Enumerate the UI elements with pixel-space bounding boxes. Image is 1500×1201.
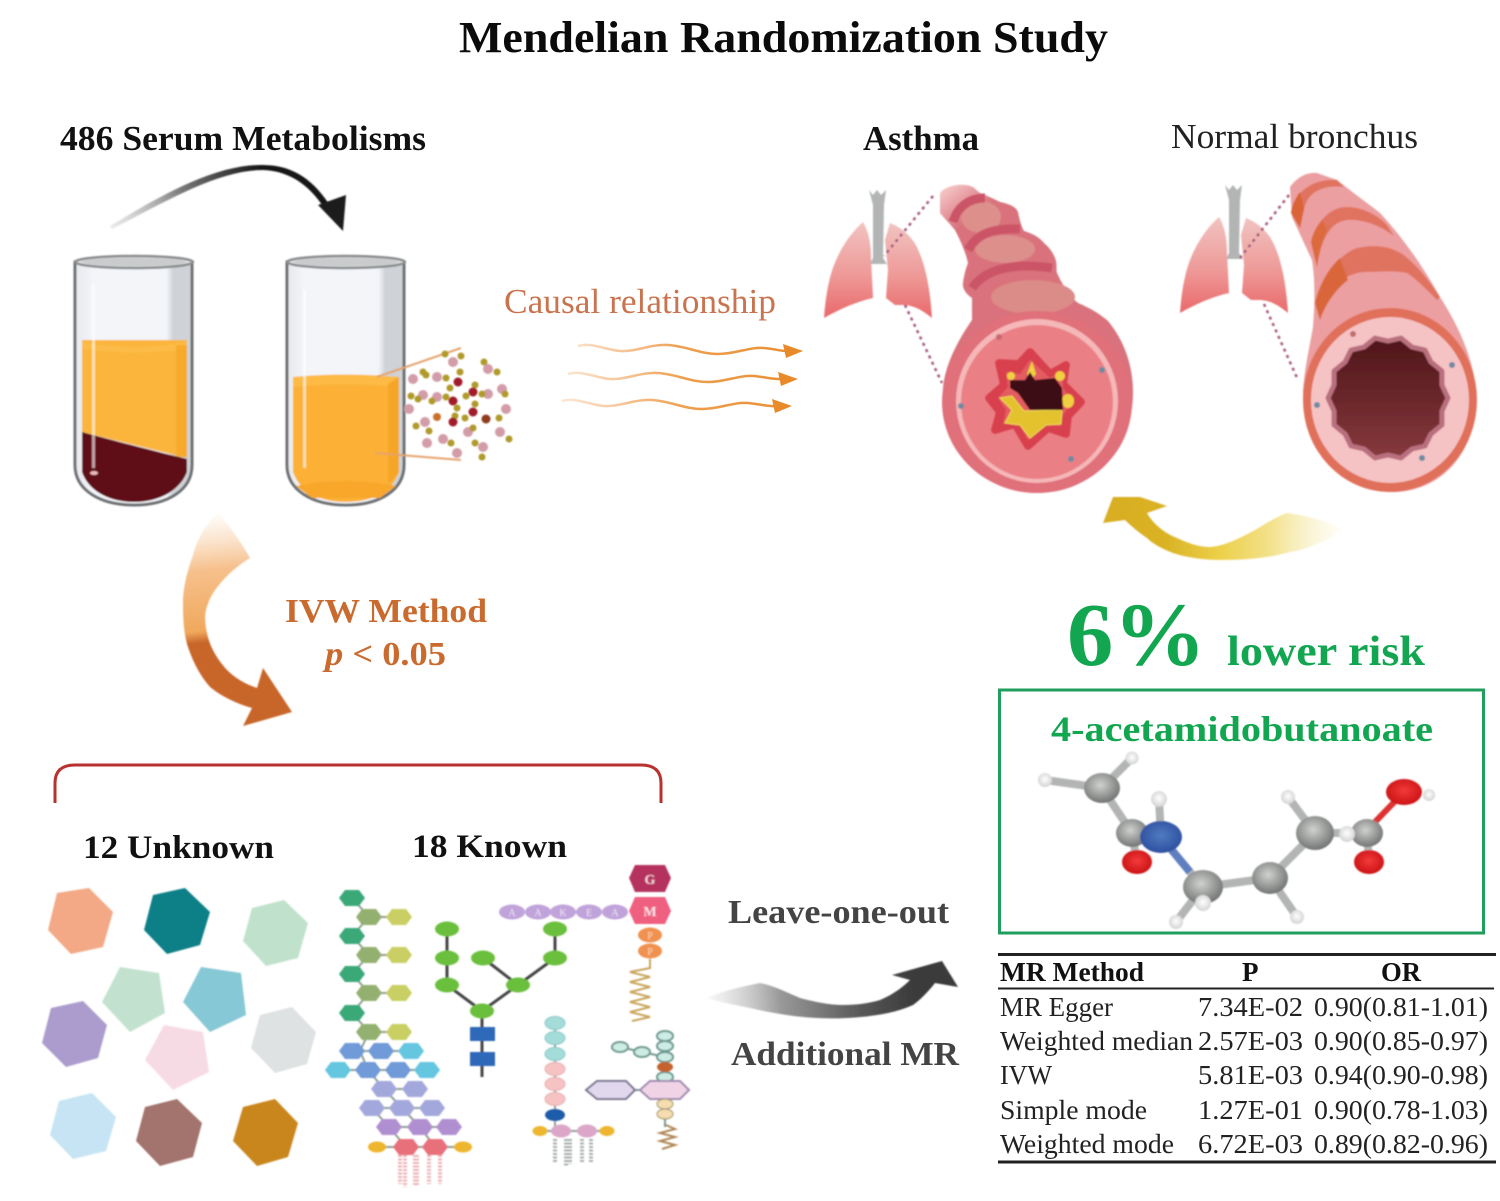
row: Weighted median: 0.90(0.85-0.97)	[1314, 1026, 1488, 1056]
row: IVW: 0.94(0.90-0.98)	[1314, 1060, 1488, 1090]
icon: normal lungs	[1180, 185, 1298, 380]
row: MR Egger	[1000, 992, 1488, 1022]
arrow: gray curved arrow	[707, 961, 958, 1018]
arrow: orange IVW arrow	[183, 512, 292, 726]
heading: 486 serum metabolisms: 486 Serum Metabolisms	[60, 119, 426, 158]
label: additional MR: Additional MR	[731, 1036, 959, 1073]
heading: asthma: Asthma	[863, 119, 979, 158]
table header	[1000, 957, 1421, 987]
row: MR Egger: 7.34E-02	[1198, 992, 1303, 1022]
table header: MR Method	[1000, 957, 1144, 987]
label: IVW method: IVW Method	[285, 593, 487, 630]
icon: normal airway	[1290, 173, 1477, 492]
label: causal relationship: Causal relationship	[504, 282, 776, 321]
heading: 12 unknown: 12 Unknown	[83, 830, 274, 866]
molecule model	[1038, 752, 1435, 929]
row: Weighted mode: 6.72E-03	[1198, 1129, 1303, 1159]
GPI anchor: top right	[499, 865, 671, 1021]
heading: 18 known: 18 Known	[412, 829, 567, 865]
GPI anchor: top right: K	[559, 908, 567, 919]
label: leave-one-out: Leave-one-out	[728, 894, 950, 931]
title: Mendelian Randomization Study	[459, 13, 1108, 62]
text: 6% lower risk: lower risk	[1227, 629, 1426, 675]
row: MR Egger: 0.90(0.81-1.01)	[1314, 992, 1488, 1022]
row: Simple mode: 1.27E-01	[1198, 1095, 1303, 1125]
arrow: curved black arrow between tubes	[110, 165, 346, 231]
compound name: 4-acetamidobutanoate	[1051, 709, 1433, 749]
label: IVW method	[285, 593, 487, 673]
icon: serum tube	[287, 256, 405, 505]
glycan tree: center	[435, 922, 567, 1077]
table: MR results	[998, 954, 1496, 1162]
row: Weighted median: 2.57E-03	[1198, 1026, 1303, 1056]
bracket	[55, 765, 661, 803]
GPI anchor: top right: P	[647, 947, 653, 958]
panel: 4-acetamidobutanoate molecule	[1000, 690, 1484, 933]
GPI anchor: top right: A	[611, 908, 619, 919]
icons: unknown metabolite shapes	[42, 888, 316, 1166]
row: Weighted median: Weighted median	[1000, 1026, 1194, 1056]
lipid chain: middle	[532, 1016, 614, 1166]
row: Simple mode	[1000, 1095, 1488, 1125]
icon: metabolite particles	[375, 348, 512, 460]
arrows: wavy causal arrows	[562, 344, 803, 413]
GPI anchor: top right: P	[647, 931, 653, 942]
heading: normal bronchus: Normal bronchus	[1171, 117, 1418, 156]
row: IVW	[1000, 1060, 1488, 1090]
GPI anchor: top right: A	[534, 908, 542, 919]
arrow: yellow curved arrow	[1103, 497, 1343, 560]
GPI anchor: top right: A	[508, 908, 516, 919]
row: Weighted mode	[1000, 1129, 1488, 1159]
label: IVW method: p < 0.05	[322, 636, 446, 673]
text: 6% lower risk	[1067, 586, 1426, 685]
icon: whole blood tube	[75, 256, 193, 505]
icon: asthma airway	[940, 185, 1133, 493]
row: IVW: 5.81E-03	[1198, 1060, 1303, 1090]
table header: P	[1242, 957, 1258, 987]
lipid chain: left	[325, 890, 472, 1187]
row: Weighted mode: Weighted mode	[1000, 1129, 1174, 1159]
GPI anchor: top right: E	[586, 908, 592, 919]
row: Simple mode: Simple mode	[1000, 1095, 1147, 1125]
row: IVW: IVW	[1000, 1060, 1052, 1090]
icon: asthma lungs	[824, 190, 942, 383]
GPI anchor: top right: M	[643, 905, 657, 920]
glycolipid: lower right	[586, 1031, 689, 1149]
row: Weighted median	[1000, 1026, 1488, 1056]
text: 6% lower risk: 6%	[1067, 586, 1206, 685]
icons: known metabolite lipid structures	[325, 865, 689, 1187]
row: Simple mode: 0.90(0.78-1.03)	[1314, 1095, 1488, 1125]
table header: OR	[1381, 957, 1421, 987]
row: Weighted mode: 0.89(0.82-0.96)	[1314, 1129, 1488, 1159]
row: MR Egger: MR Egger	[1000, 992, 1113, 1022]
GPI anchor: top right: G	[645, 873, 656, 888]
